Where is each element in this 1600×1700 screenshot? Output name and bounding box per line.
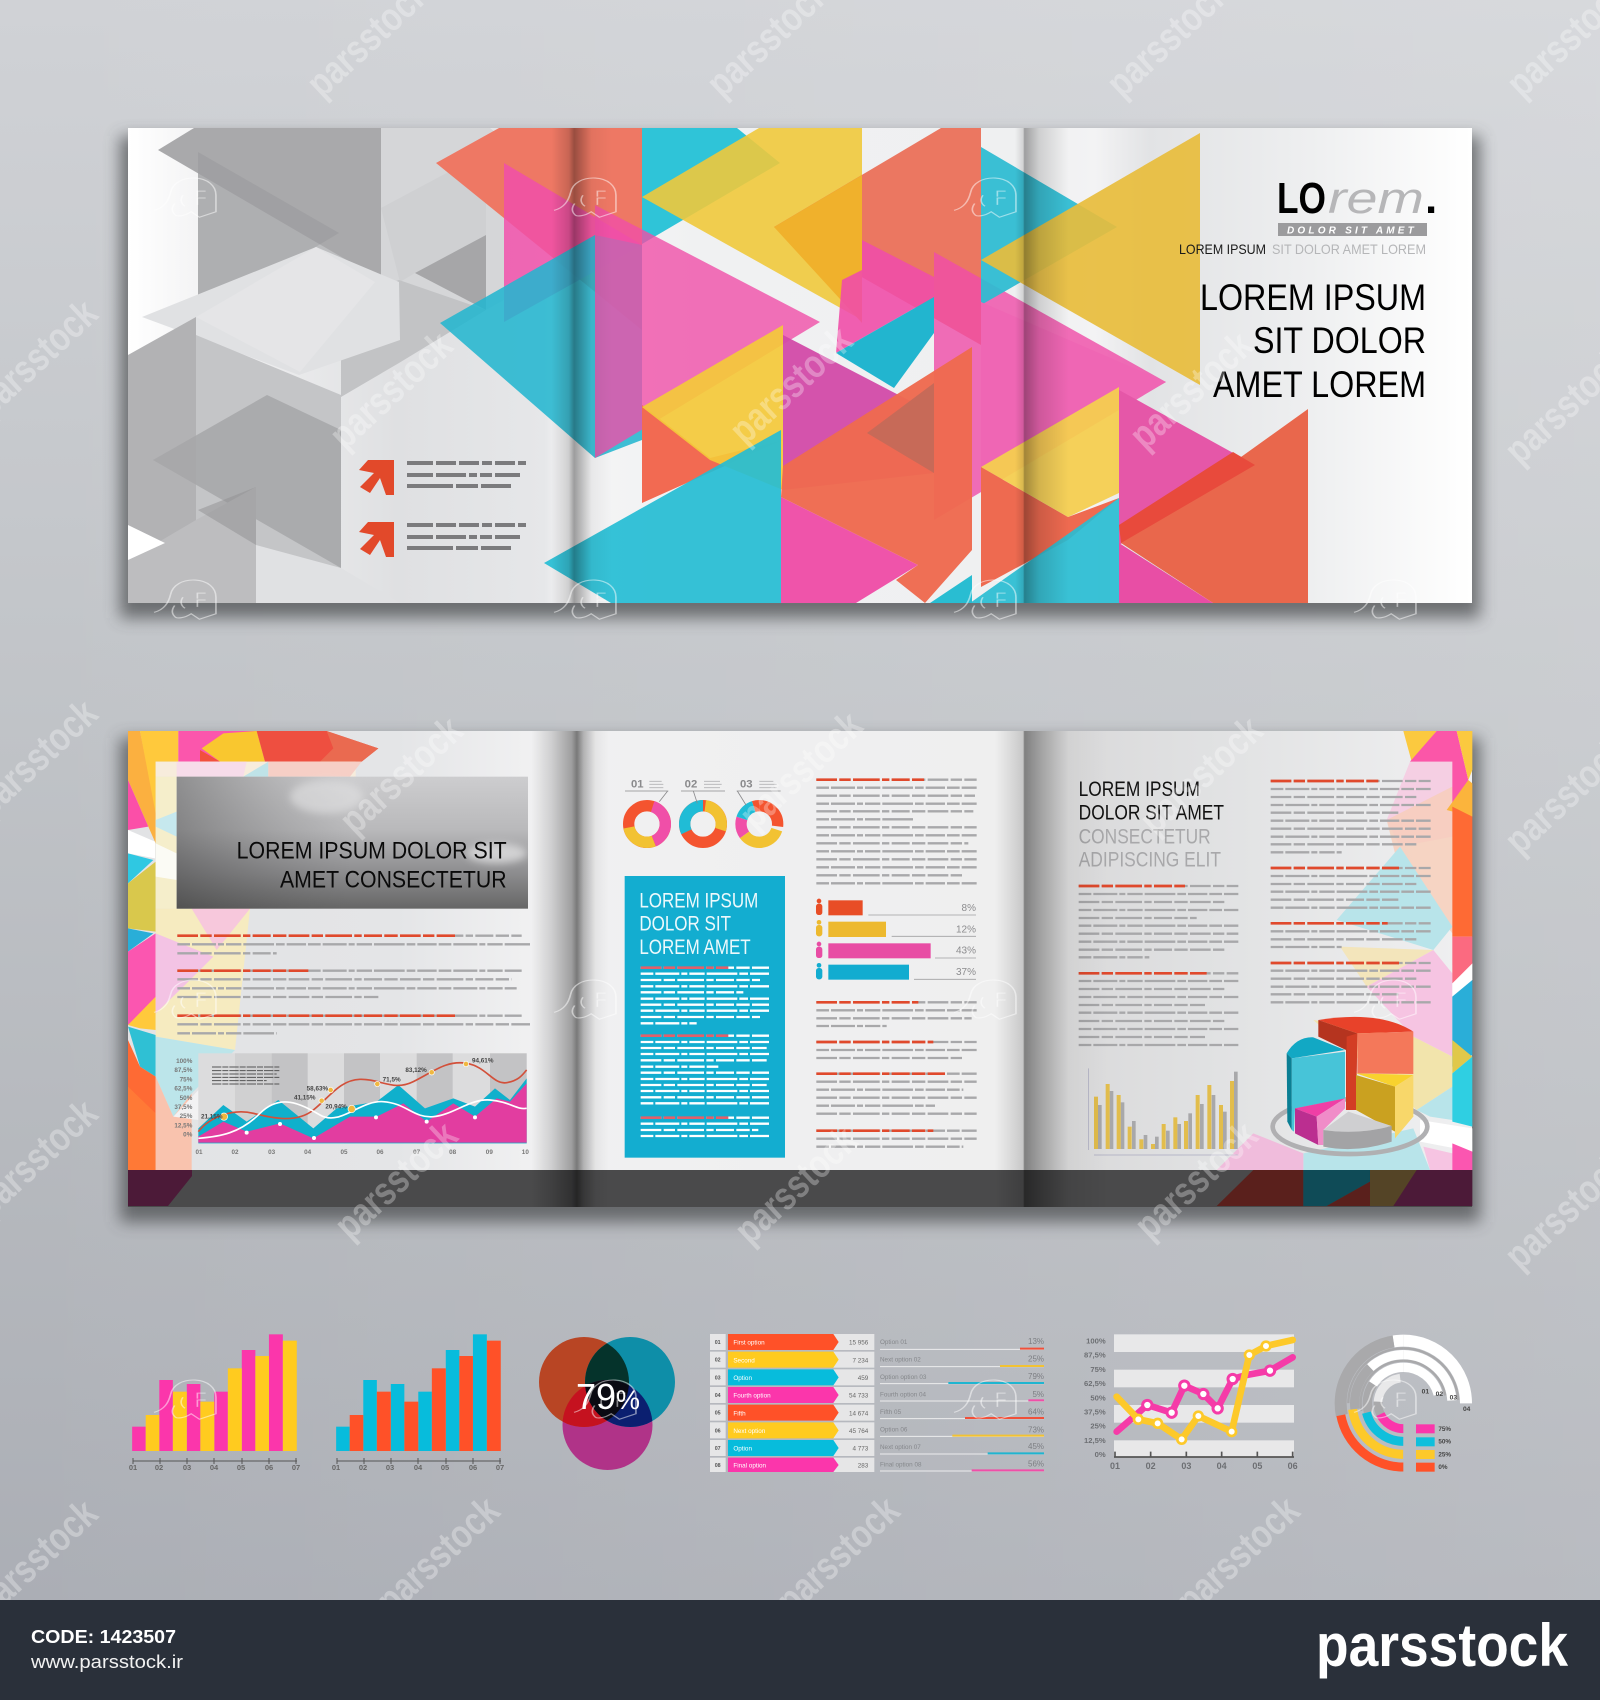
website: www.parsstock.ir bbox=[30, 1652, 183, 1672]
option labels: Option bbox=[733, 1375, 752, 1382]
option values: 14 674 bbox=[849, 1410, 869, 1417]
options table bbox=[710, 1334, 1044, 1472]
watermarks: parsstock bbox=[768, 1488, 908, 1623]
bar chart 1: 02 bbox=[155, 1463, 163, 1472]
arrow bars bbox=[728, 1334, 839, 1350]
title image block: LOREM IPSUM DOLOR SIT bbox=[237, 837, 507, 864]
chart x axis labels bbox=[195, 1149, 529, 1156]
right percentages: 5% bbox=[1032, 1390, 1044, 1399]
line chart y labels: 25% bbox=[1090, 1422, 1106, 1431]
venn diagram 79% bbox=[539, 1337, 675, 1470]
logo: LO bbox=[1277, 174, 1326, 223]
line chart x labels: 05 bbox=[1252, 1461, 1262, 1471]
legend bbox=[1416, 1424, 1451, 1472]
panel: middle page bbox=[625, 779, 977, 1158]
panel: right page bbox=[1079, 731, 1472, 1170]
people bar chart: 37% bbox=[956, 967, 976, 978]
right percentages: 64% bbox=[1028, 1408, 1044, 1417]
line chart y labels: 75% bbox=[1090, 1365, 1106, 1374]
people bar chart: 8% bbox=[962, 903, 976, 914]
logo: DOLOR SIT AMET bbox=[1287, 226, 1417, 236]
legend: 25% bbox=[1438, 1451, 1451, 1458]
line chart y labels: 12,5% bbox=[1084, 1436, 1106, 1445]
cover title: LOREM IPSUM bbox=[1200, 277, 1426, 318]
chart value labels bbox=[201, 1058, 494, 1120]
right option labels: Fourth option 04 bbox=[880, 1391, 927, 1398]
bar chart 1: 01 bbox=[129, 1463, 137, 1472]
number and value cells bbox=[710, 1334, 874, 1472]
chart value labels: 94,61% bbox=[472, 1058, 494, 1065]
spine shading inside bbox=[128, 731, 1472, 1207]
right column text bottom bbox=[816, 1002, 977, 1147]
line chart x labels: 02 bbox=[1146, 1461, 1156, 1471]
chart y axis labels: 75% bbox=[180, 1076, 193, 1083]
line chart y labels bbox=[1084, 1336, 1106, 1459]
footer bar bbox=[0, 1600, 1600, 1700]
donut labels: 03 bbox=[740, 779, 753, 791]
coloured triangle pattern bbox=[436, 128, 1308, 603]
bar chart 1: 05 bbox=[237, 1463, 245, 1472]
bar chart 2: 01 bbox=[332, 1463, 340, 1472]
brochure inside spread bbox=[128, 731, 1472, 1207]
line chart bbox=[1084, 1334, 1298, 1471]
panel: left page bbox=[128, 731, 530, 1170]
right option labels bbox=[880, 1339, 927, 1468]
ring labels bbox=[1422, 1388, 1471, 1413]
watermarks: parsstock bbox=[1121, 323, 1261, 458]
watermarks: parsstock bbox=[331, 708, 471, 843]
chart x axis labels: 08 bbox=[449, 1149, 457, 1156]
line chart x labels: 06 bbox=[1288, 1461, 1298, 1471]
venn diagram 79%: 79% bbox=[576, 1376, 640, 1417]
right option labels: Next option 07 bbox=[880, 1444, 921, 1451]
cover subtitle bbox=[1179, 241, 1426, 257]
option values: 54 733 bbox=[849, 1393, 869, 1400]
grey triangle pattern bbox=[128, 128, 504, 603]
page heading bbox=[1079, 778, 1224, 872]
chart y axis labels: 87,5% bbox=[174, 1067, 193, 1074]
cyan text panel: LOREM IPSUM bbox=[639, 889, 758, 912]
row numbers: 06 bbox=[715, 1428, 721, 1434]
ring labels: 02 bbox=[1436, 1391, 1443, 1398]
third ring bbox=[1365, 1365, 1441, 1441]
icon: arrow 1 bbox=[359, 460, 394, 495]
page heading: CONSECTETUR bbox=[1079, 825, 1211, 848]
donut charts bbox=[629, 806, 778, 842]
3D pie chart bbox=[1273, 1017, 1427, 1154]
watermarks: parsstock bbox=[368, 1488, 508, 1623]
dark bottom band bbox=[128, 1170, 1472, 1207]
watermarks: parsstock bbox=[1168, 1488, 1308, 1623]
chart y axis labels: 50% bbox=[180, 1095, 193, 1102]
bar chart 2: 07 bbox=[496, 1463, 504, 1472]
brochure shadows bbox=[120, 136, 1480, 1222]
body text lines bbox=[177, 936, 530, 1033]
chart value labels: 20,94% bbox=[325, 1104, 347, 1111]
option labels: Final option bbox=[733, 1463, 767, 1470]
donut 03 bbox=[741, 806, 778, 842]
line chart y labels: 100% bbox=[1086, 1336, 1106, 1345]
cover title bbox=[1200, 277, 1426, 405]
watermarks: parsstock bbox=[1126, 1113, 1266, 1248]
option labels: Next option bbox=[733, 1428, 766, 1435]
cover title: AMET LOREM bbox=[1213, 364, 1426, 405]
bar chart 2: 04 bbox=[414, 1463, 423, 1472]
bar chart 2: 06 bbox=[469, 1463, 477, 1472]
chart x axis labels: 09 bbox=[486, 1149, 493, 1156]
inner ring bbox=[1378, 1378, 1429, 1429]
bar chart 2: 02 bbox=[359, 1463, 367, 1472]
colour strip left bbox=[128, 731, 178, 1170]
row numbers bbox=[715, 1340, 721, 1469]
chart y axis labels: 62,5% bbox=[174, 1086, 193, 1093]
bar chart 1 bbox=[129, 1334, 300, 1472]
small bar chart bbox=[1088, 1068, 1238, 1155]
donut 02 bbox=[685, 806, 721, 842]
chart x axis labels: 10 bbox=[522, 1149, 529, 1156]
chart x axis labels: 04 bbox=[304, 1149, 312, 1156]
text column 2 bbox=[1271, 781, 1431, 1002]
people bar chart bbox=[816, 899, 976, 980]
chart x axis labels: 07 bbox=[413, 1149, 421, 1156]
row numbers: 08 bbox=[715, 1463, 721, 1469]
chart y axis labels: 0% bbox=[183, 1132, 193, 1139]
title image block: AMET CONSECTETUR bbox=[280, 866, 507, 893]
line chart y labels: 37,5% bbox=[1084, 1408, 1106, 1417]
bar chart 2: 03 bbox=[386, 1463, 394, 1472]
ring labels: 04 bbox=[1463, 1406, 1471, 1413]
ring separators bbox=[1348, 1348, 1458, 1458]
icon: arrow 2 bbox=[359, 522, 394, 557]
donut 01 bbox=[629, 806, 665, 842]
pale frame shapes bbox=[156, 762, 362, 1170]
watermarks: parsstock bbox=[1131, 708, 1271, 843]
line chart x labels: 01 bbox=[1110, 1461, 1120, 1471]
cyan text panel: DOLOR SIT bbox=[639, 913, 731, 936]
cover subtitle: SIT DOLOR AMET LOREM bbox=[1272, 241, 1426, 257]
row numbers: 03 bbox=[715, 1375, 721, 1381]
chart small note bbox=[212, 1067, 279, 1084]
chart x axis labels: 02 bbox=[231, 1149, 239, 1156]
chart y axis labels: 100% bbox=[176, 1058, 193, 1065]
line chart x labels: 04 bbox=[1217, 1461, 1227, 1471]
option labels: Fifth bbox=[733, 1410, 746, 1417]
colour strip right bbox=[1403, 731, 1472, 1170]
chart value labels: 71,5% bbox=[383, 1076, 401, 1083]
watermarks: parsstock bbox=[721, 318, 861, 453]
page heading: LOREM IPSUM bbox=[1079, 778, 1200, 801]
right option labels: Final option 08 bbox=[880, 1461, 922, 1468]
radial chart bbox=[1340, 1340, 1471, 1472]
page heading: DOLOR SIT AMET bbox=[1079, 801, 1224, 824]
row numbers: 02 bbox=[715, 1358, 721, 1364]
outer ring bbox=[1340, 1340, 1467, 1467]
arrow bullet list bbox=[359, 460, 526, 557]
donut labels bbox=[625, 779, 781, 805]
percent lines bbox=[880, 1349, 1044, 1471]
chart y axis labels: 37,5% bbox=[174, 1104, 193, 1111]
row numbers: 05 bbox=[715, 1411, 721, 1417]
chart y axis labels: 12,5% bbox=[174, 1122, 193, 1129]
option labels: Second bbox=[733, 1357, 755, 1364]
chart y axis labels bbox=[174, 1058, 193, 1139]
footer logo: parsstock bbox=[1316, 1612, 1569, 1679]
people bar chart: 12% bbox=[956, 924, 976, 935]
brochure cover spread bbox=[128, 128, 1472, 603]
option values: 459 bbox=[858, 1375, 869, 1382]
ring labels: 03 bbox=[1450, 1395, 1457, 1402]
chart value labels: 21,15% bbox=[201, 1113, 223, 1120]
spine shading bbox=[555, 128, 1062, 603]
chart x axis labels: 03 bbox=[268, 1149, 276, 1156]
donut labels: 02 bbox=[685, 779, 697, 791]
line chart x labels: 03 bbox=[1181, 1461, 1191, 1471]
bar chart 1: 03 bbox=[183, 1463, 191, 1472]
row numbers: 01 bbox=[715, 1340, 721, 1346]
logo: rem bbox=[1328, 174, 1424, 223]
pale background shapes bbox=[1217, 762, 1452, 1170]
option values: 45 764 bbox=[849, 1428, 869, 1435]
option values: 15 956 bbox=[849, 1340, 869, 1347]
colour strip top bbox=[178, 731, 378, 762]
option labels: Fourth option bbox=[733, 1393, 771, 1400]
legend: 75% bbox=[1438, 1426, 1451, 1433]
chart value labels: 83,12% bbox=[405, 1067, 427, 1074]
chart value labels: 41,15% bbox=[294, 1095, 316, 1102]
right option labels: Option option 03 bbox=[880, 1374, 927, 1381]
watermarks: parsstock bbox=[321, 323, 461, 458]
second ring bbox=[1352, 1352, 1454, 1454]
right option labels: Fifth 05 bbox=[880, 1409, 902, 1416]
line chart y labels: 62,5% bbox=[1084, 1379, 1106, 1388]
right option labels: Next option 02 bbox=[880, 1356, 921, 1363]
text column 1 bbox=[1079, 886, 1238, 1045]
line chart y labels: 87,5% bbox=[1084, 1351, 1106, 1360]
cover title: SIT DOLOR bbox=[1253, 320, 1426, 361]
chart x axis labels: 01 bbox=[195, 1149, 203, 1156]
cyan text panel: LOREM AMET bbox=[639, 936, 751, 959]
logo: . bbox=[1425, 174, 1437, 223]
cyan text panel bbox=[625, 876, 785, 1158]
bar chart 2: 05 bbox=[441, 1463, 449, 1472]
page heading: ADIPISCING ELIT bbox=[1079, 849, 1221, 872]
chart x axis labels: 05 bbox=[340, 1149, 348, 1156]
right percentages: 79% bbox=[1028, 1372, 1044, 1381]
row numbers: 04 bbox=[715, 1393, 721, 1399]
logo bbox=[1277, 174, 1437, 236]
bar chart 1: 07 bbox=[292, 1463, 300, 1472]
bar chart 1: 06 bbox=[265, 1463, 273, 1472]
right percentages bbox=[1028, 1337, 1044, 1468]
legend: 0% bbox=[1438, 1464, 1448, 1471]
chart y axis labels: 25% bbox=[180, 1113, 193, 1120]
watermarks: parsstock bbox=[326, 1113, 466, 1248]
donut labels: 01 bbox=[631, 779, 644, 791]
bar chart 2 bbox=[332, 1334, 504, 1472]
line chart y labels: 50% bbox=[1090, 1393, 1106, 1402]
row numbers: 07 bbox=[715, 1446, 721, 1452]
line chart y labels: 0% bbox=[1095, 1450, 1106, 1459]
area line chart bbox=[174, 1053, 529, 1156]
right percentages: 73% bbox=[1028, 1425, 1044, 1434]
title image block bbox=[177, 777, 528, 909]
product code: CODE: 1423507 bbox=[31, 1627, 176, 1647]
right column text top bbox=[816, 780, 977, 883]
option values: 283 bbox=[858, 1463, 869, 1470]
right option labels: Option 06 bbox=[880, 1427, 908, 1434]
option values bbox=[849, 1340, 869, 1470]
option labels: Option bbox=[733, 1446, 752, 1453]
bar chart 1: 04 bbox=[210, 1463, 219, 1472]
right option labels: Option 01 bbox=[880, 1339, 908, 1346]
legend: 50% bbox=[1438, 1439, 1451, 1446]
chart value labels: 58,63% bbox=[307, 1085, 329, 1092]
option values: 4 773 bbox=[852, 1446, 869, 1453]
line chart x labels bbox=[1110, 1461, 1298, 1471]
watermarks: parsstock bbox=[726, 1118, 866, 1253]
bullet text lines bbox=[407, 463, 526, 548]
chart x axis labels: 06 bbox=[376, 1149, 384, 1156]
right percentages: 25% bbox=[1028, 1354, 1044, 1363]
option values: 7 234 bbox=[852, 1357, 869, 1364]
people bar chart: 43% bbox=[956, 945, 976, 956]
ring labels: 01 bbox=[1422, 1388, 1429, 1395]
right percentages: 13% bbox=[1028, 1337, 1044, 1346]
right percentages: 45% bbox=[1028, 1442, 1044, 1451]
option labels: First option bbox=[733, 1340, 765, 1347]
cover subtitle: LOREM IPSUM bbox=[1179, 241, 1266, 257]
option labels bbox=[733, 1340, 771, 1470]
right percentages: 56% bbox=[1028, 1459, 1044, 1468]
watermarks: parsstock bbox=[731, 703, 871, 838]
